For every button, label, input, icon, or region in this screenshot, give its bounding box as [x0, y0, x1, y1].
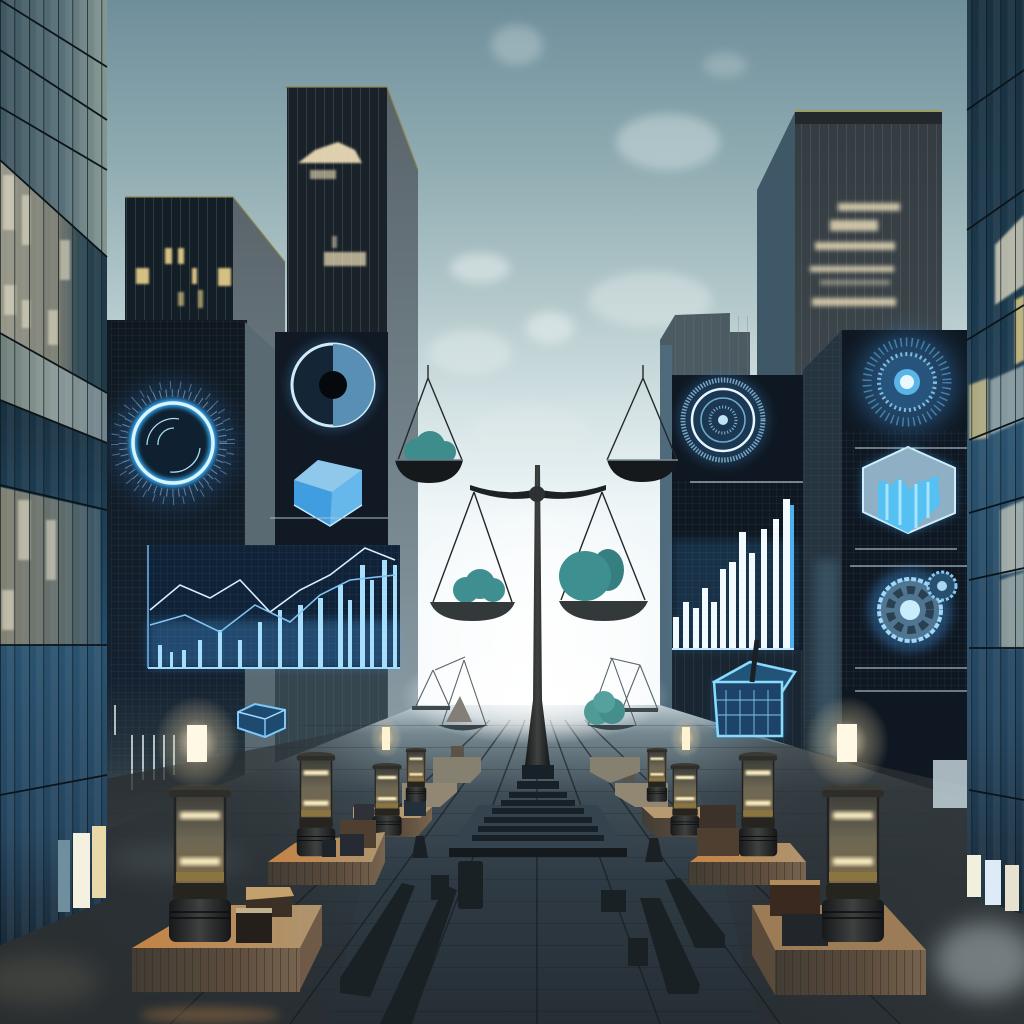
lit windows centre-left tower: [298, 142, 366, 266]
scale pole: [525, 465, 550, 765]
right lanterns: [647, 748, 700, 836]
building: far right glass: [933, 0, 1024, 915]
small distant scale left: [412, 657, 488, 730]
scale beam: [470, 485, 606, 499]
icon: swirling blue orb: [857, 332, 957, 432]
far left crates: [353, 746, 481, 837]
hanging scale upper left: [395, 365, 463, 483]
stepped base: [449, 765, 627, 857]
front wooden platform right: [752, 784, 926, 995]
building: right main block: [803, 330, 969, 800]
horizon fog glow: [365, 490, 705, 790]
lit ground windows left: [58, 826, 106, 912]
chart: right bar chart: [672, 499, 797, 650]
mid wooden platform left: [268, 752, 385, 885]
chart lines: [150, 548, 395, 632]
small post ornaments: [412, 836, 663, 862]
icon: small floating cube left: [238, 704, 285, 737]
building: left block with holographic panel: [107, 320, 275, 830]
mullion rows: [0, 0, 107, 795]
window reflections far left: [2, 175, 70, 630]
window reflections far right: [969, 215, 1024, 648]
chart: left line and bar chart: [148, 545, 400, 668]
lit windows right tower: [810, 203, 900, 306]
icon: blue cube: [294, 460, 362, 526]
wall lamps: [155, 696, 889, 788]
icon: half disc: [287, 339, 379, 431]
fog over floor: [400, 645, 670, 745]
building: centre panel with disc and cube: [270, 332, 388, 815]
right pan: [559, 492, 648, 621]
left lanterns: [372, 748, 426, 836]
small distant scale right: [584, 658, 658, 730]
building: right background tower: [757, 111, 942, 472]
far right crates: [590, 748, 720, 837]
panel: glowing ring: [111, 381, 235, 505]
left pan: [430, 492, 515, 621]
clouds: [428, 25, 747, 454]
floor with wooden planks: [0, 705, 1024, 1024]
icon: open box hologram: [714, 640, 795, 738]
icon: concentric rings: [677, 374, 769, 466]
building: far left glass: [0, 0, 107, 945]
building: centre-left tall tower: [285, 87, 418, 770]
floor reflections: [140, 1007, 280, 1023]
distant wood platforms: [353, 746, 720, 837]
central balance scale: [430, 465, 648, 857]
icon: hexagon bar gem: [863, 447, 955, 533]
mid wooden platform right: [688, 752, 806, 885]
building: right panel block with target and bars: [672, 374, 805, 795]
vertical light slits: [114, 705, 175, 790]
icon: gears: [868, 568, 956, 652]
dark bench planks on floor: [340, 861, 725, 1024]
chart bars: [158, 560, 397, 668]
building: right small back block: [660, 313, 750, 790]
front wooden platform left: [132, 784, 322, 992]
lit ground windows right: [967, 855, 1019, 911]
lit windows left mid tower: [136, 248, 231, 308]
building: left mid tower: [125, 197, 285, 800]
right mullion rows: [967, 70, 1024, 800]
sky background: [0, 0, 1024, 760]
hanging scale upper right: [607, 365, 678, 482]
